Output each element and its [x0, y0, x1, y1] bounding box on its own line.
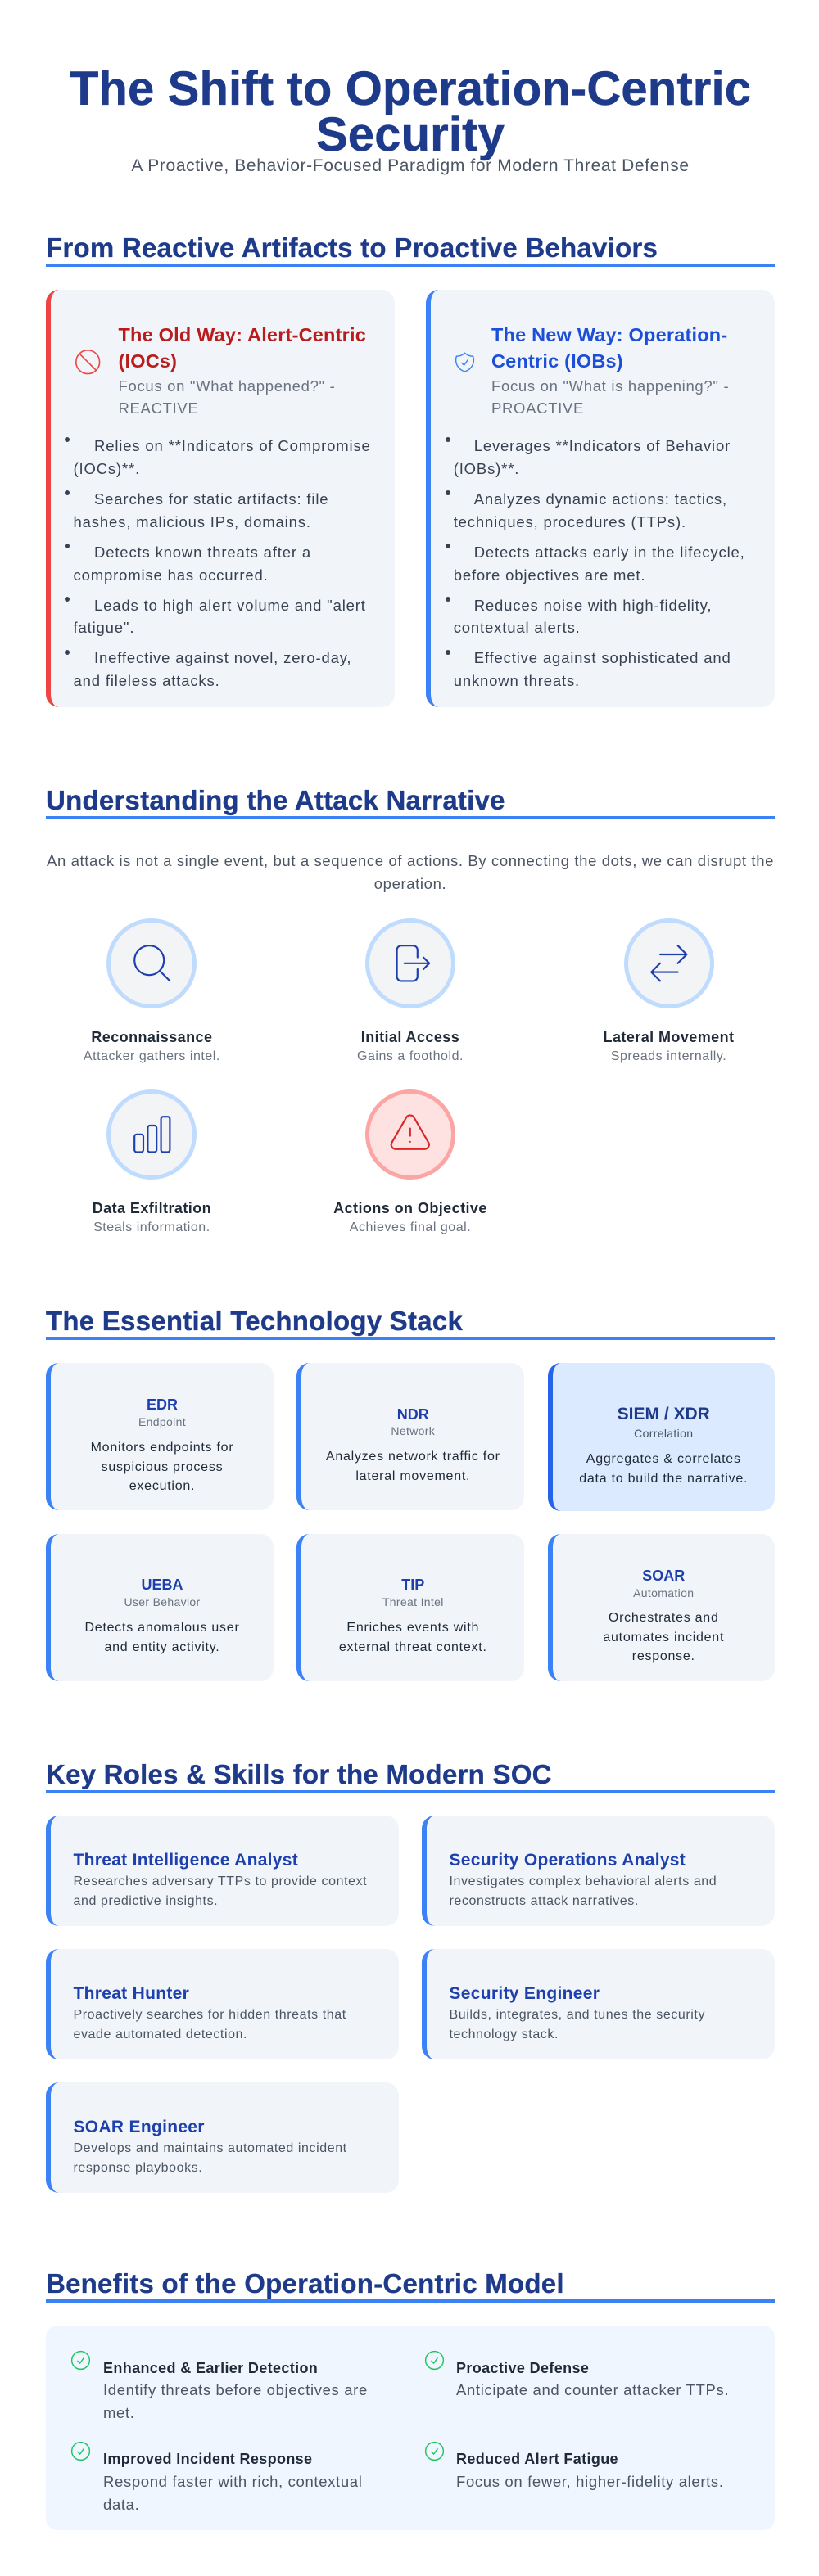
intro text: operation. [374, 875, 446, 892]
role title: SOAR Engineer [74, 2117, 205, 2136]
panel: SOAR [547, 1534, 775, 1681]
panel: EDR [46, 1363, 274, 1510]
heading: benefits of the operation-centric model [46, 2267, 775, 2303]
role description: Researches adversary TTPs to provide context [74, 1874, 367, 1888]
old way bullet list: Searches for static artifacts: file [94, 490, 328, 508]
step: data exfiltration [93, 1089, 211, 1234]
role title: Threat Hunter [74, 1984, 189, 2002]
old way heading [118, 324, 366, 372]
EDR title: EDR [147, 1396, 178, 1413]
old way bullet list: compromise has occurred. [74, 566, 269, 584]
icon: exit arrow [365, 918, 455, 1008]
old way subheading [118, 377, 335, 416]
benefit title: Enhanced & Earlier Detection [103, 2360, 318, 2376]
SOAR title: SOAR [642, 1568, 685, 1584]
old way bullet list: (IOCs)**. [74, 460, 140, 477]
lateral movement label: Lateral Movement [604, 1029, 734, 1045]
step: reconnaissance [84, 918, 220, 1063]
panel: UEBA [46, 1534, 274, 1681]
actions on objective label: Actions on Objective [333, 1200, 487, 1216]
panel: SIEM / XDR [547, 1362, 775, 1511]
SOAR description: Orchestrates and [609, 1611, 719, 1625]
role description [449, 2008, 705, 2041]
heading: key roles and skills: Key Roles & Skills for the Modern SOC [46, 1758, 552, 1789]
UEBA description: and entity activity. [105, 1640, 219, 1654]
subtitle: A Proactive, Behavior-Focused Paradigm for Modern Threat Defense [131, 156, 690, 175]
role description: Develops and maintains automated incident [74, 2141, 347, 2155]
panel: threat hunter [46, 1949, 399, 2059]
benefit title: Improved Incident Response [103, 2451, 312, 2467]
UEBA title: UEBA [141, 1577, 183, 1593]
SIEM description [579, 1452, 748, 1486]
benefit description: Anticipate and counter attacker TTPs. [456, 2381, 729, 2398]
step: initial access [357, 918, 464, 1063]
role description: response playbooks. [74, 2161, 202, 2175]
role description: Proactively searches for hidden threats that [74, 2008, 346, 2022]
icon: magnifying glass [106, 918, 197, 1008]
icon: prohibited sign [75, 350, 100, 375]
heading: understanding the attack narrative [46, 783, 775, 819]
UEBA description [84, 1621, 240, 1654]
new way bullet list: techniques, procedures (TTPs). [454, 513, 686, 530]
icon: shield check [455, 352, 475, 372]
icon: bar chart [106, 1089, 197, 1180]
TIP description: Enriches events with [346, 1621, 479, 1635]
new way bullet list: Detects attacks early in the lifecycle, [474, 544, 745, 561]
heading: the essential technology stack [46, 1304, 775, 1340]
TIP title: TIP [401, 1577, 424, 1593]
old way bullet list: Ineffective against novel, zero-day, [94, 649, 351, 666]
icon: check circle [424, 2441, 444, 2461]
old way subheading: Focus on "What happened?" - [118, 377, 335, 395]
benefit description: data. [103, 2496, 139, 2513]
NDR description [326, 1450, 500, 1483]
intro text [47, 851, 774, 892]
role description: and predictive insights. [74, 1894, 218, 1908]
icon: opposing arrows [624, 918, 714, 1008]
title: The Shift to Operation-Centric [70, 62, 751, 115]
old way heading: (IOCs) [118, 350, 177, 372]
old way bullet list: Leads to high alert volume and "alert [94, 596, 366, 614]
new way heading: The New Way: Operation- [491, 324, 727, 345]
SIEM description: Aggregates & correlates [586, 1452, 741, 1466]
benefit description: met. [103, 2404, 135, 2421]
role description [449, 1874, 717, 1908]
new way bullet list: (IOBs)**. [454, 460, 519, 477]
heading: the essential technology stack: The Essential Technology Stack [46, 1306, 463, 1336]
intro text: An attack is not a single event, but a sequence of actions. By connecting the dots, we can disrupt the [47, 851, 774, 869]
role description: evade automated detection. [74, 2028, 247, 2041]
new way heading [491, 324, 727, 372]
benefit: proactive defense [424, 2351, 729, 2398]
heading: understanding the attack narrative: Understanding the Attack Narrative [46, 784, 505, 815]
benefit: enhanced and earlier detection [70, 2351, 368, 2421]
data exfiltration label: Data Exfiltration [93, 1200, 211, 1216]
title: Security [316, 108, 505, 160]
old way bullet list: fatigue". [74, 619, 134, 636]
new way subheading: Focus on "What is happening?" - [491, 377, 729, 395]
step: lateral movement [604, 918, 734, 1063]
role description [74, 2008, 346, 2041]
new way subheading: PROACTIVE [491, 399, 584, 416]
EDR category: Endpoint [138, 1415, 186, 1428]
panel: benefits [46, 2326, 775, 2530]
title [70, 62, 751, 160]
benefit title: Proactive Defense [456, 2360, 589, 2376]
panel: security engineer [422, 1949, 775, 2059]
benefit description: Respond faster with rich, contextual [103, 2473, 362, 2490]
new way bullet list: Effective against sophisticated and [474, 649, 731, 666]
old way heading: The Old Way: Alert-Centric [118, 324, 366, 345]
reconnaissance label: Reconnaissance [91, 1029, 212, 1045]
heading: from reactive artifacts to proactive behaviors: From Reactive Artifacts to Proactive Behaviors [46, 232, 658, 263]
icon: warning triangle [365, 1089, 455, 1180]
new way bullet list: Analyzes dynamic actions: tactics, [474, 490, 727, 508]
role title: Security Engineer [449, 1984, 600, 2002]
new way subheading [491, 377, 729, 416]
role description: reconstructs attack narratives. [449, 1894, 639, 1908]
EDR description [91, 1441, 233, 1493]
new way heading: Centric (IOBs) [491, 350, 623, 372]
SOAR description [603, 1611, 724, 1663]
panel: threat intelligence analyst [46, 1816, 399, 1926]
step: actions on objective [333, 1089, 487, 1234]
new way bullet list: Reduces noise with high-fidelity, [474, 596, 712, 614]
data exfiltration caption: Steals information. [93, 1220, 210, 1234]
new way bullet list: Leverages **Indicators of Behavior [474, 437, 731, 454]
UEBA category: User Behavior [124, 1595, 201, 1608]
benefit title: Reduced Alert Fatigue [456, 2451, 618, 2467]
panel: NDR [296, 1363, 524, 1510]
panel: TIP [296, 1534, 524, 1681]
benefit description: Focus on fewer, higher-fidelity alerts. [456, 2473, 724, 2490]
NDR description: lateral movement. [355, 1469, 470, 1483]
panel: the new way [426, 290, 775, 707]
NDR description: Analyzes network traffic for [326, 1450, 500, 1464]
panel: the old way [46, 290, 395, 707]
reconnaissance caption: Attacker gathers intel. [84, 1049, 220, 1063]
new way bullet list: unknown threats. [454, 672, 580, 689]
SOAR category: Automation [633, 1586, 694, 1599]
SOAR description: automates incident [603, 1631, 724, 1644]
initial access label: Initial Access [361, 1029, 459, 1045]
TIP category: Threat Intel [382, 1595, 444, 1608]
benefit: improved incident response [70, 2441, 362, 2513]
icon: check circle [70, 2351, 90, 2371]
old way bullet list: hashes, malicious IPs, domains. [74, 513, 311, 530]
benefit description: Identify threats before objectives are [103, 2381, 368, 2398]
initial access caption: Gains a foothold. [357, 1049, 464, 1063]
old way subheading: REACTIVE [118, 399, 198, 416]
panel: security operations analyst [422, 1816, 775, 1926]
new way bullet list: before objectives are met. [454, 566, 645, 584]
benefit description [103, 2381, 368, 2421]
TIP description [339, 1621, 487, 1654]
panel: SOAR engineer [46, 2082, 399, 2193]
EDR description: execution. [129, 1479, 195, 1493]
role description: Investigates complex behavioral alerts and [449, 1874, 717, 1888]
UEBA description: Detects anomalous user [84, 1621, 240, 1635]
role description [74, 1874, 367, 1908]
role title: Security Operations Analyst [449, 1850, 686, 1870]
new way bullet list: contextual alerts. [454, 619, 581, 636]
icon: check circle [70, 2441, 90, 2461]
benefit description [103, 2473, 362, 2513]
old way bullet list: and fileless attacks. [74, 672, 220, 689]
TIP description: external threat context. [339, 1640, 487, 1654]
EDR description: suspicious process [102, 1460, 223, 1474]
icon: check circle [424, 2351, 444, 2371]
SIEM title: SIEM / XDR [618, 1405, 710, 1423]
SOAR description: response. [632, 1649, 695, 1663]
NDR category: Network [391, 1424, 435, 1437]
role description [74, 2141, 347, 2175]
SIEM description: data to build the narrative. [579, 1472, 748, 1486]
role title: Threat Intelligence Analyst [74, 1850, 298, 1870]
NDR title: NDR [397, 1406, 429, 1423]
old way bullet list: Detects known threats after a [94, 544, 311, 561]
old way bullet list: Relies on **Indicators of Compromise [94, 437, 371, 454]
new way bullet list [446, 437, 745, 689]
EDR description: Monitors endpoints for [91, 1441, 233, 1455]
role description: technology stack. [449, 2028, 559, 2041]
heading: key roles and skills [46, 1757, 775, 1793]
actions on objective caption: Achieves final goal. [350, 1220, 471, 1234]
role description: Builds, integrates, and tunes the security [449, 2008, 705, 2022]
SIEM category: Correlation [634, 1427, 693, 1440]
lateral movement caption: Spreads internally. [611, 1049, 726, 1063]
heading: benefits of the operation-centric model: Benefits of the Operation-Centric Model [46, 2268, 564, 2299]
old way bullet list [65, 437, 371, 689]
benefit: reduced alert fatigue [424, 2441, 724, 2490]
